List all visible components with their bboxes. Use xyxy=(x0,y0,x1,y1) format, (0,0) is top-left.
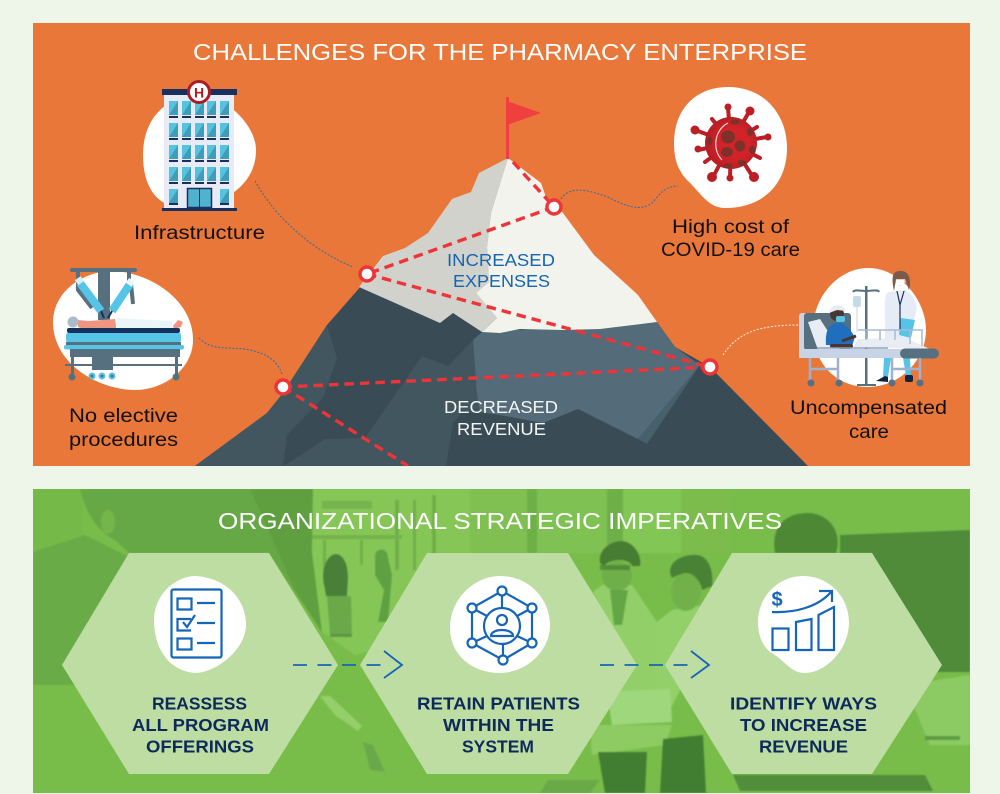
heading: strategic imperatives: ORGANIZATIONAL STRATEGIC IMPERATIVES xyxy=(218,508,782,534)
text: reassess xyxy=(132,694,269,756)
text: identify: REVENUE xyxy=(759,736,848,756)
hexagon: identify xyxy=(665,553,942,774)
label: no elective procedures: procedures xyxy=(69,429,178,451)
text: retain: RETAIN PATIENTS xyxy=(417,694,580,714)
text: reassess: ALL PROGRAM xyxy=(132,715,269,735)
text: identify: IDENTIFY WAYS xyxy=(730,694,877,714)
connectors xyxy=(199,181,799,375)
background photo tint xyxy=(33,489,970,793)
label: infrastructure: Infrastructure xyxy=(134,222,265,244)
icon: hospital xyxy=(143,82,256,211)
label: decreased revenue: DECREASED xyxy=(444,397,558,417)
hexagon: retain xyxy=(360,553,637,774)
label: increased expenses: EXPENSES xyxy=(453,271,550,291)
label: no elective procedures xyxy=(69,405,178,451)
icon: coronavirus xyxy=(674,87,787,208)
arrow: reassess to retain xyxy=(293,651,402,678)
arrow: retain to identify xyxy=(600,651,709,678)
text: identify xyxy=(730,694,877,756)
text: retain: WITHIN THE xyxy=(443,715,554,735)
text: retain xyxy=(417,694,580,756)
text: identify: TO INCREASE xyxy=(740,715,867,735)
icon: revenue chart xyxy=(758,576,849,673)
panel: strategic imperatives xyxy=(33,489,970,793)
icon: revenue chart: $ xyxy=(771,589,783,611)
icon: hospital: H xyxy=(194,84,204,100)
label: uncompensated care xyxy=(790,397,947,443)
panel: challenges xyxy=(33,23,970,466)
text: reassess: OFFERINGS xyxy=(146,736,254,756)
icon: robotic surgery xyxy=(53,268,193,390)
label: increased expenses xyxy=(447,250,555,291)
label: high cost of covid-19 care xyxy=(661,216,800,261)
label: high cost of covid-19 care: High cost of xyxy=(672,216,790,238)
route markers xyxy=(276,200,717,394)
label: uncompensated care: Uncompensated xyxy=(790,397,947,419)
text: reassess: REASSESS xyxy=(152,694,247,714)
label: uncompensated care: care xyxy=(849,421,889,443)
label: decreased revenue xyxy=(444,397,558,439)
label: high cost of covid-19 care: COVID-19 care xyxy=(661,239,800,261)
icon: patient network xyxy=(450,576,550,673)
label: decreased revenue: REVENUE xyxy=(457,419,546,439)
mountain xyxy=(195,97,808,466)
hexagon: reassess xyxy=(62,553,338,774)
icon: hospital bed with patient and doctor xyxy=(799,268,939,387)
text: retain: SYSTEM xyxy=(462,736,534,756)
label: no elective procedures: No elective xyxy=(69,405,178,427)
label: increased expenses: INCREASED xyxy=(447,250,555,270)
heading: challenges: CHALLENGES FOR THE PHARMACY ENTERPRISE xyxy=(193,39,807,65)
red dashed route xyxy=(283,162,710,466)
icon: checklist xyxy=(154,576,246,673)
flag xyxy=(506,97,541,159)
